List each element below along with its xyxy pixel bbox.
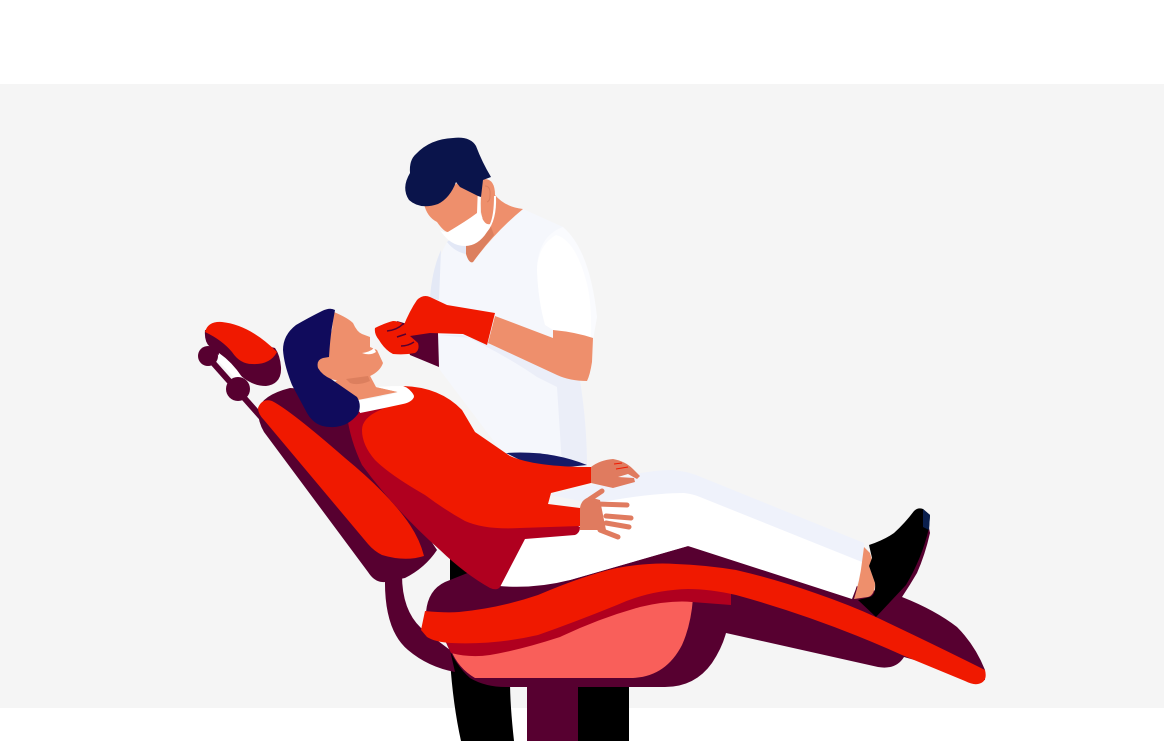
patient face	[314, 312, 383, 382]
patient shoe	[858, 508, 930, 617]
dentist neck	[466, 195, 523, 262]
patient figure	[283, 309, 930, 617]
patient lower hand	[580, 491, 631, 537]
face mask	[440, 186, 496, 246]
patient upper hand	[591, 459, 640, 488]
patient waistband	[506, 452, 587, 470]
neck shadow	[346, 376, 370, 384]
ear detail	[485, 186, 490, 202]
smile	[362, 348, 376, 354]
dentist hair	[405, 138, 491, 206]
red seat stripe	[421, 564, 986, 684]
dentist ear	[481, 179, 495, 223]
collar shadow	[447, 238, 466, 254]
dentist face	[424, 175, 482, 232]
chair column	[527, 680, 578, 741]
red glove upper hand	[403, 296, 495, 345]
base pink panel	[451, 598, 693, 678]
patient collar	[358, 386, 414, 413]
sweater	[362, 386, 591, 528]
backrest	[258, 388, 437, 582]
glove finger creases	[387, 324, 414, 346]
torso side shadow	[430, 250, 441, 300]
headrest	[205, 322, 281, 386]
patient trousers front leg	[499, 493, 862, 599]
base dark shell	[426, 546, 985, 687]
headrest pipe and knobs	[198, 346, 262, 418]
sweater shadow	[347, 405, 580, 589]
dark shape behind gloves	[397, 321, 439, 367]
sleeve	[537, 227, 597, 340]
patient hair	[283, 309, 360, 427]
dentist torso	[432, 209, 597, 467]
torso lower shadow	[439, 335, 587, 467]
dentist arm	[488, 316, 593, 381]
patient neck	[330, 372, 398, 400]
dentist legs	[450, 555, 629, 741]
patient ankle	[854, 547, 875, 599]
chair pipe arm	[385, 575, 455, 672]
dentist figure	[375, 138, 597, 467]
red glove lower hand	[375, 321, 419, 354]
seat and base	[421, 546, 986, 687]
dark red band	[445, 585, 731, 656]
patient trousers back leg	[550, 470, 864, 565]
